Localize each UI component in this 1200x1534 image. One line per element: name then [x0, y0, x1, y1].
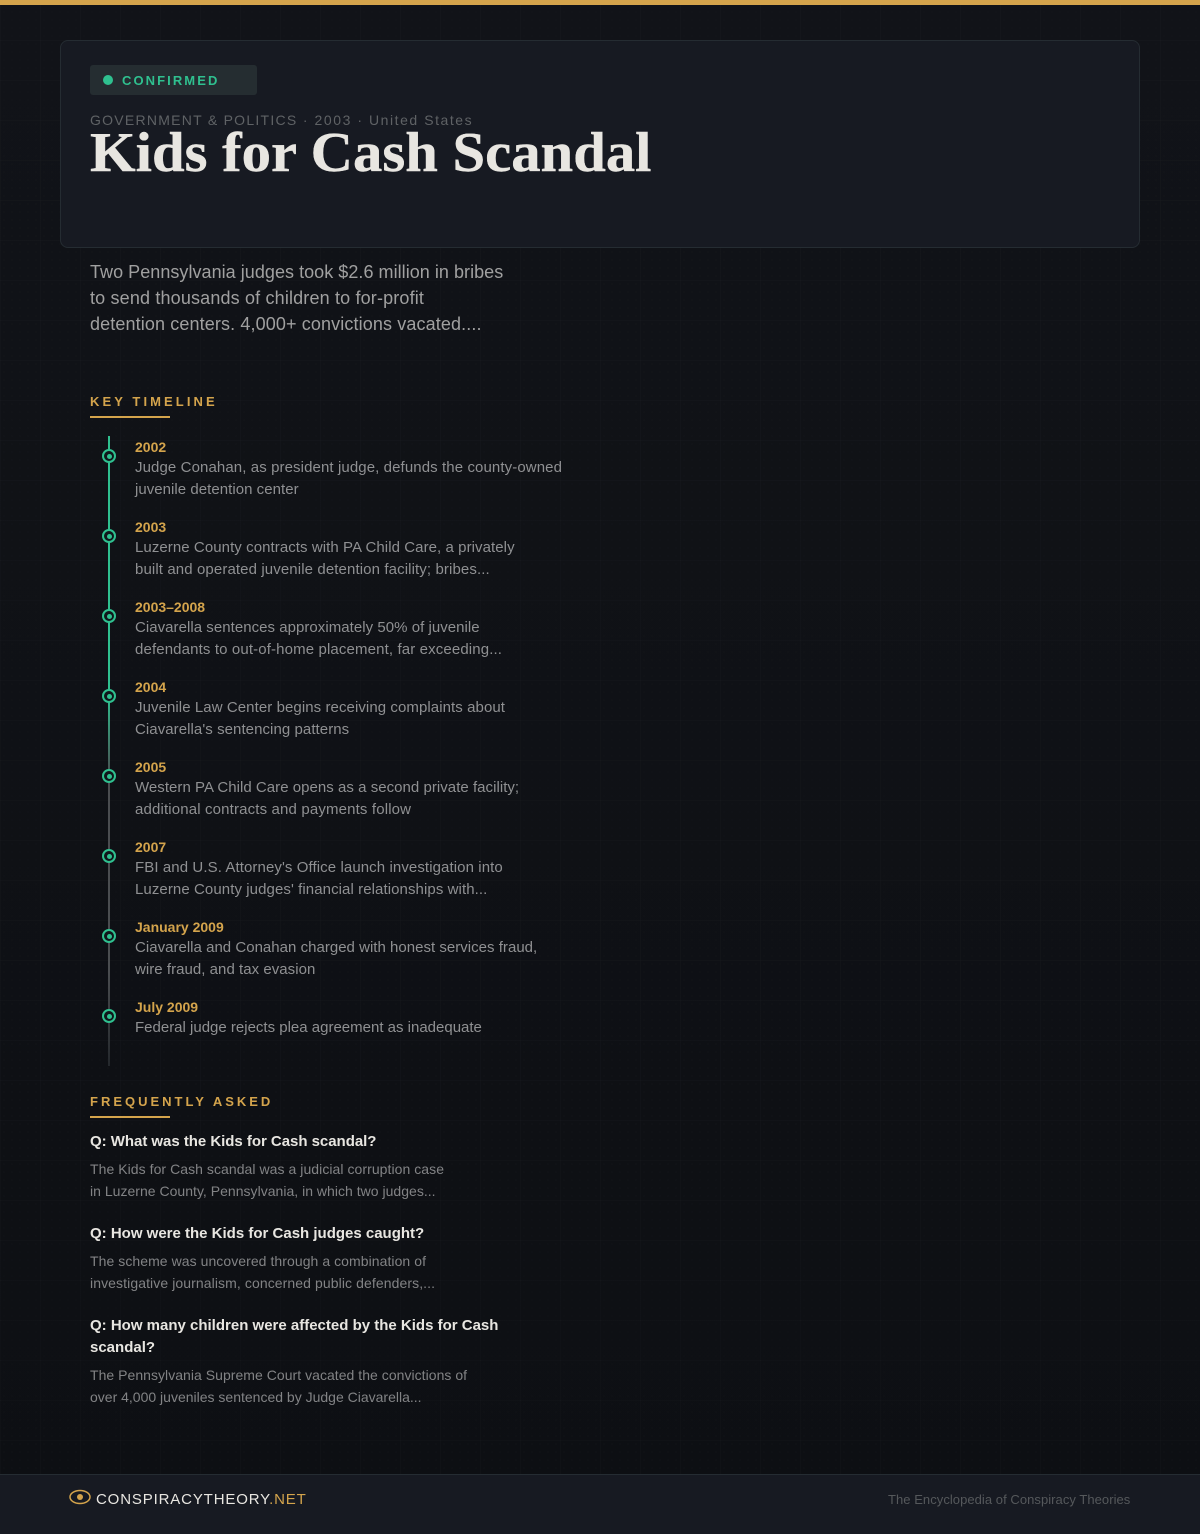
summary text: to send thousands of children to for-profit	[90, 288, 424, 308]
footer brand: CONSPIRACYTHEORY.NET	[96, 1491, 307, 1508]
icon: status dot	[103, 75, 113, 85]
timeline: 2003–2008	[135, 599, 205, 615]
heading: key timeline: KEY TIMELINE	[90, 394, 218, 409]
timeline: 2002	[135, 439, 166, 455]
faq list: Q: How many children were affected by the Kids for Cash	[90, 1317, 498, 1334]
timeline: July 2009	[135, 999, 198, 1015]
faq list: investigative journalism, concerned public defenders,...	[90, 1275, 435, 1291]
faq list	[90, 1133, 498, 1405]
timeline: Ciavarella's sentencing patterns	[135, 721, 349, 738]
timeline: 2003	[135, 519, 166, 535]
timeline: defendants to out-of-home placement, far exceeding...	[135, 641, 502, 658]
status badge	[90, 65, 257, 95]
footer tagline: The Encyclopedia of Conspiracy Theories	[888, 1492, 1130, 1507]
panel: header card	[60, 40, 1140, 248]
timeline: 2004	[135, 679, 166, 695]
faq list: Q: What was the Kids for Cash scandal?	[90, 1133, 376, 1150]
faq list: over 4,000 juveniles sentenced by Judge Ciavarella...	[90, 1389, 422, 1405]
summary text: Two Pennsylvania judges took $2.6 million in bribes	[90, 262, 503, 282]
faq list: The Pennsylvania Supreme Court vacated the convictions of	[90, 1367, 467, 1383]
timeline: built and operated juvenile detention facility; bribes...	[135, 561, 490, 578]
timeline: Luzerne County contracts with PA Child Care, a privately	[135, 539, 515, 556]
faq list: in Luzerne County, Pennsylvania, in which two judges...	[90, 1183, 436, 1199]
timeline: January 2009	[135, 919, 224, 935]
timeline: Judge Conahan, as president judge, defunds the county-owned	[135, 459, 562, 476]
timeline: Juvenile Law Center begins receiving complaints about	[135, 699, 505, 716]
timeline: Ciavarella and Conahan charged with honest services fraud,	[135, 939, 537, 956]
timeline: 2007	[135, 839, 166, 855]
category and date line: GOVERNMENT & POLITICS · 2003 · United States	[90, 112, 473, 128]
faq list: Q: How were the Kids for Cash judges caught?	[90, 1225, 424, 1242]
heading: frequently asked: FREQUENTLY ASKED	[90, 1094, 273, 1109]
summary text: detention centers. 4,000+ convictions vacated....	[90, 314, 482, 334]
panel: footer	[0, 1474, 1200, 1534]
timeline: juvenile detention center	[135, 481, 299, 498]
timeline: Federal judge rejects plea agreement as inadequate	[135, 1019, 482, 1036]
timeline: Ciavarella sentences approximately 50% of juvenile	[135, 619, 480, 636]
timeline	[102, 436, 562, 1066]
timeline: Western PA Child Care opens as a second private facility;	[135, 779, 519, 796]
timeline: Luzerne County judges' financial relationships with...	[135, 881, 487, 898]
faq list: The Kids for Cash scandal was a judicial corruption case	[90, 1161, 444, 1177]
timeline: additional contracts and payments follow	[135, 801, 411, 818]
icon: eye logo	[69, 1490, 91, 1504]
badge label: CONFIRMED	[122, 73, 219, 88]
summary text	[90, 262, 503, 334]
title: Kids for Cash Scandal	[90, 122, 651, 184]
timeline: FBI and U.S. Attorney's Office launch investigation into	[135, 859, 503, 876]
faq list: scandal?	[90, 1339, 155, 1356]
timeline: 2005	[135, 759, 166, 775]
faq list: The scheme was uncovered through a combination of	[90, 1253, 426, 1269]
timeline: wire fraud, and tax evasion	[135, 961, 315, 978]
